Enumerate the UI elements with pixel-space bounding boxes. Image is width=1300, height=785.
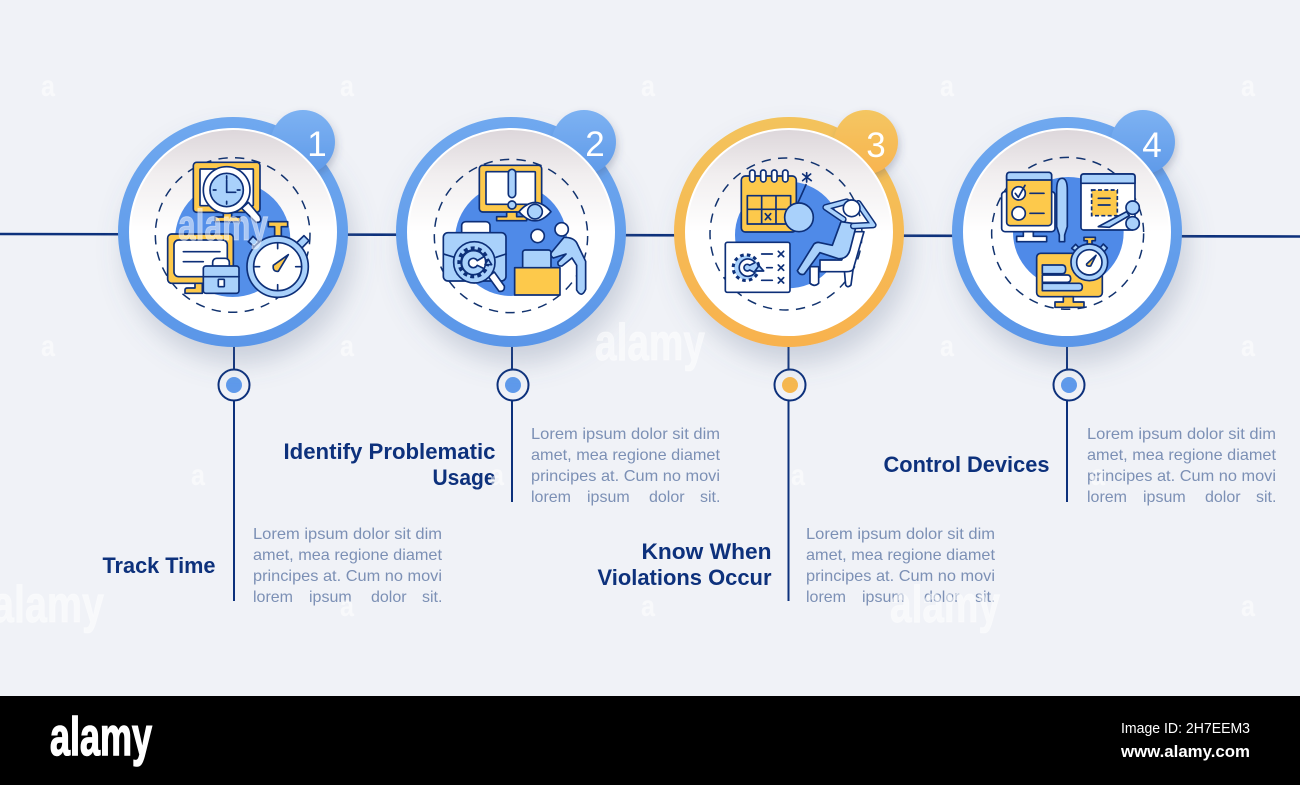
watermarks: a bbox=[340, 330, 354, 363]
watermarks: a bbox=[191, 459, 205, 492]
text block: step 1: amet, mea regione diamet bbox=[253, 547, 443, 564]
watermarks: a bbox=[1241, 330, 1255, 363]
watermarks: a bbox=[340, 590, 354, 623]
heading: Identify Problematic Usage bbox=[284, 439, 496, 490]
text block: step 4: amet, mea regione diamet bbox=[1087, 447, 1277, 464]
heading: Know When Violations Occur: Violations Occur bbox=[598, 565, 772, 590]
icon: calendar, bomb, checklist gear, relaxed person bbox=[710, 158, 873, 310]
image id: Image ID: 2H7EEM3 bbox=[1121, 720, 1250, 737]
text block: step 4 bbox=[1087, 426, 1277, 506]
text block: step 1: principes at. Cum no movi bbox=[253, 568, 442, 585]
watermarks: a bbox=[1241, 590, 1255, 623]
text block: step 3: sit. bbox=[975, 589, 995, 606]
horizontal timeline line bbox=[0, 234, 1300, 236]
text block: step 4: Lorem ipsum dolor sit dim bbox=[1087, 426, 1276, 443]
text block: step 2: amet, mea regione diamet bbox=[531, 447, 721, 464]
footer logo: alamy bbox=[50, 707, 152, 767]
watermarks: alamy bbox=[178, 201, 268, 250]
number badge 1: 1 bbox=[307, 125, 327, 164]
watermarks: alamy bbox=[595, 314, 705, 372]
number badge 1 bbox=[271, 110, 335, 174]
text block: step 3 bbox=[806, 526, 996, 606]
footer bar bbox=[0, 696, 1300, 785]
number badge 4 bbox=[1111, 110, 1175, 174]
number badge 2 bbox=[552, 110, 616, 174]
text block: step 3: ipsum bbox=[862, 589, 905, 606]
text block: step 1 bbox=[253, 526, 443, 606]
vertical connector: step 1 bbox=[233, 340, 235, 601]
text block: step 3: Lorem ipsum dolor sit dim bbox=[806, 526, 995, 543]
text block: step 2: principes at. Cum no movi bbox=[531, 468, 720, 485]
panel: step 4 circle bbox=[952, 110, 1182, 347]
watermarks: a bbox=[940, 330, 954, 363]
panel: step 3 circle bbox=[674, 110, 904, 347]
text block: step 2: dolor bbox=[649, 489, 685, 506]
panel: step 2 circle bbox=[396, 110, 626, 347]
heading: Track Time: Track Time bbox=[102, 553, 216, 578]
number badge 3: 3 bbox=[866, 126, 886, 165]
number badge 4: 4 bbox=[1142, 126, 1162, 165]
icon: monitor, clock, briefcase, stopwatch bbox=[155, 158, 310, 312]
heading: Identify Problematic Usage: Identify Problematic bbox=[284, 439, 496, 464]
watermarks: a bbox=[1241, 70, 1255, 103]
heading: Know When Violations Occur bbox=[598, 539, 772, 590]
watermarks: a bbox=[791, 459, 805, 492]
text block: step 3: lorem bbox=[806, 589, 846, 606]
watermarks: a bbox=[641, 70, 655, 103]
number badge 3 bbox=[834, 110, 898, 174]
watermarks bbox=[0, 70, 1255, 634]
text block: step 4: lorem bbox=[1087, 489, 1127, 506]
heading: Identify Problematic Usage: Usage bbox=[432, 465, 496, 490]
text block: step 2: sit. bbox=[700, 489, 720, 506]
text block: step 3: principes at. Cum no movi bbox=[806, 568, 995, 585]
number badge 2: 2 bbox=[585, 125, 605, 164]
text block: step 4: ipsum bbox=[1143, 489, 1186, 506]
node: step 2 bbox=[498, 370, 528, 400]
vertical connector: step 2 bbox=[511, 340, 513, 502]
icon: checklist monitor, pen, crop window, chart monitor with stopwatch bbox=[992, 157, 1144, 309]
text block: step 1: Lorem ipsum dolor sit dim bbox=[253, 526, 442, 543]
watermarks: a bbox=[641, 590, 655, 623]
text block: step 1: sit. bbox=[422, 589, 442, 606]
text block: step 4: dolor bbox=[1205, 489, 1241, 506]
website: www.alamy.com bbox=[1120, 742, 1250, 761]
watermarks: a bbox=[490, 459, 504, 492]
node: step 3 bbox=[774, 370, 806, 400]
node: step 1 bbox=[218, 370, 250, 400]
text block: step 2: Lorem ipsum dolor sit dim bbox=[531, 426, 720, 443]
text block: step 3: dolor bbox=[924, 589, 960, 606]
text block: step 1: lorem bbox=[253, 589, 293, 606]
text block: step 2: ipsum bbox=[587, 489, 630, 506]
watermarks: a bbox=[940, 70, 954, 103]
text block: step 1: ipsum bbox=[309, 589, 352, 606]
heading: Know When Violations Occur: Know When bbox=[642, 539, 772, 564]
node: step 4 bbox=[1054, 370, 1084, 400]
text block: step 3: amet, mea regione diamet bbox=[806, 547, 996, 564]
watermarks: a bbox=[41, 330, 55, 363]
text block: step 4: sit. bbox=[1256, 489, 1276, 506]
text block: step 4: principes at. Cum no movi bbox=[1087, 468, 1276, 485]
watermarks: a bbox=[1091, 459, 1105, 492]
heading: Control Devices: Control Devices bbox=[884, 452, 1050, 477]
icon: monitor alert, eye, gear case, people at desk bbox=[434, 159, 588, 313]
text block: step 2: lorem bbox=[531, 489, 571, 506]
text block: step 1: dolor bbox=[371, 589, 407, 606]
panel: step 1 circle bbox=[118, 110, 348, 347]
text block: step 2 bbox=[531, 426, 721, 506]
watermarks: alamy bbox=[890, 576, 1000, 634]
watermarks: a bbox=[41, 70, 55, 103]
watermarks: a bbox=[340, 70, 354, 103]
vertical connector: step 3 bbox=[788, 340, 790, 601]
vertical connector: step 4 bbox=[1066, 340, 1068, 502]
